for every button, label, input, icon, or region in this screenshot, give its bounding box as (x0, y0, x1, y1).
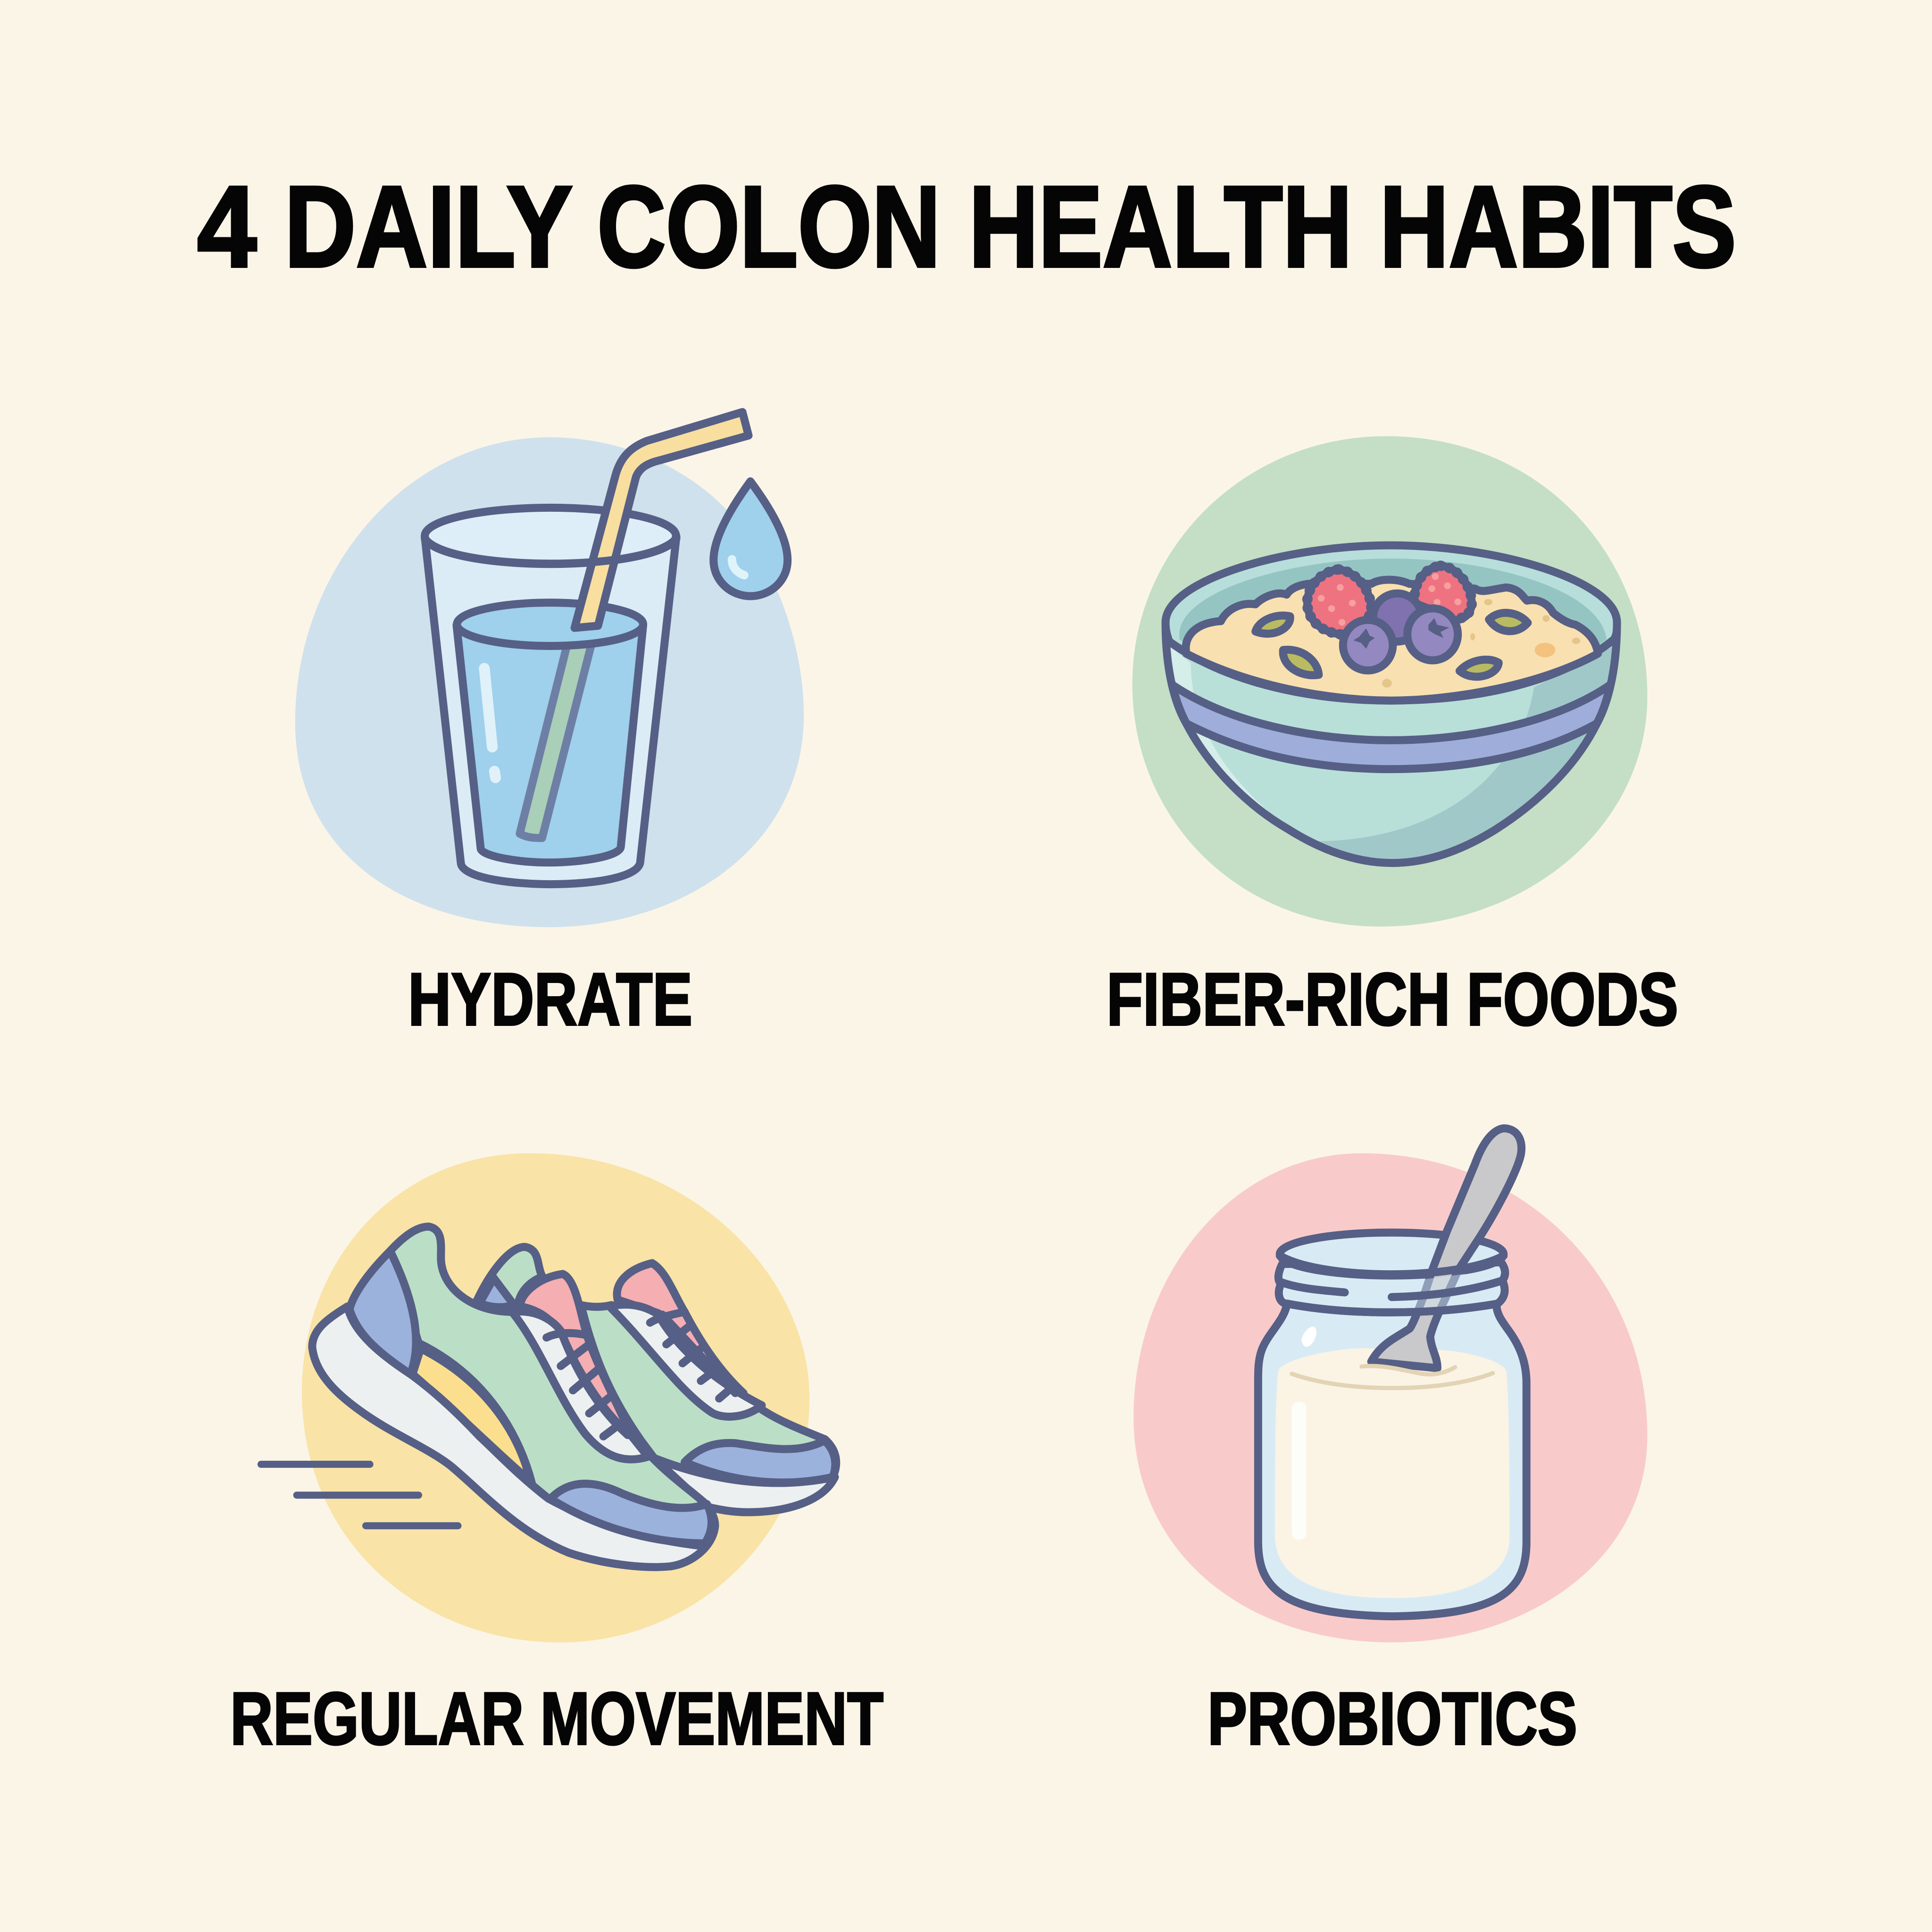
background blob: green (1133, 436, 1648, 926)
bowl drawing (1143, 545, 1627, 880)
title: HEALTH (969, 162, 1352, 291)
label: fiber-rich foods: FIBER-RICH FOODS (1107, 958, 1678, 1041)
title: 4 (197, 162, 257, 291)
jar drawing (1258, 1128, 1526, 1616)
title: HABITS (1380, 162, 1736, 291)
panel: hydrate (295, 412, 804, 1041)
label: probiotics: PROBIOTICS (1208, 1677, 1577, 1760)
icon: running shoes with motion lines (261, 1153, 836, 1642)
panel: probiotics (1133, 1128, 1648, 1760)
background blob: pink (1133, 1153, 1648, 1642)
label: regular movement: REGULAR MOVEMENT (230, 1677, 883, 1760)
background blob: yellow (302, 1153, 809, 1642)
panel: regular movement (230, 1153, 883, 1760)
title (197, 162, 1736, 291)
icon: oatmeal bowl with berries (1133, 436, 1648, 926)
shoes drawing (261, 1226, 836, 1567)
icon: yogurt jar with spoon (1133, 1128, 1648, 1642)
title: COLON (597, 162, 941, 291)
title: DAILY (284, 162, 573, 291)
icon: hydrate glass with straw and drop (295, 412, 804, 927)
panel: fiber-rich foods (1107, 436, 1678, 1041)
label: hydrate: HYDRATE (408, 958, 692, 1041)
